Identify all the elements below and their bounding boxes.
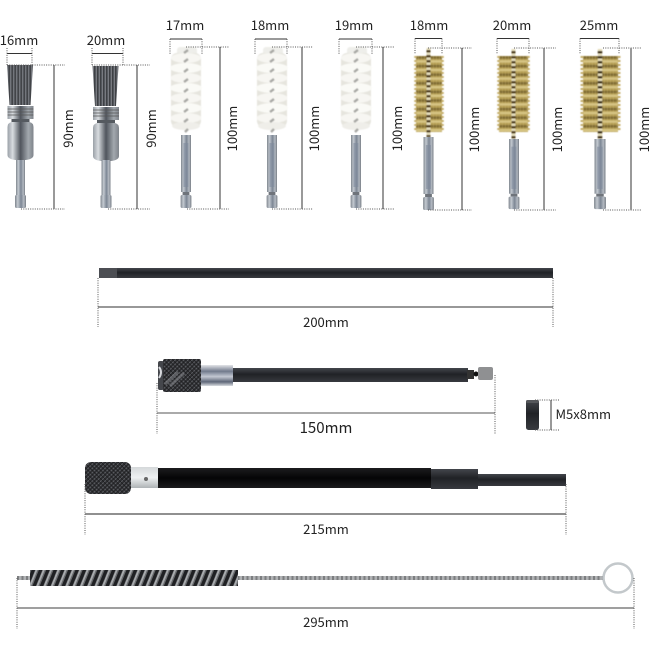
height dimension: [186, 47, 229, 209]
label: 100mm: 100mm: [304, 106, 323, 151]
hex shank: [423, 137, 434, 210]
label: 150mm: 150mm: [300, 417, 352, 438]
label: 100mm: 100mm: [547, 107, 566, 152]
extension rod: 215mm with sleeve: [85, 462, 566, 538]
length dimension: [17, 578, 634, 629]
label: 19mm: 19mm: [335, 15, 373, 34]
brush 3: 17mm nylon brush: [166, 15, 241, 209]
width dimension: [497, 38, 529, 54]
knurled chuck: [158, 359, 201, 392]
extension rod: 150mm with knurled chuck: [157, 359, 495, 438]
nylon head: [170, 47, 202, 132]
label: 90mm: 90mm: [141, 109, 160, 148]
shank: [15, 160, 26, 208]
width dimension: [415, 38, 442, 54]
rod: [99, 268, 553, 278]
label: 200mm: 200mm: [303, 312, 349, 331]
black shaft: [158, 468, 431, 488]
brush 1: 16mm wire end brush: [0, 30, 77, 209]
brush 8: 25mm brass brush: [580, 15, 650, 210]
height dimension: [272, 47, 313, 209]
length dimension: [85, 484, 566, 535]
label: 18mm: 18mm: [410, 15, 448, 34]
sleeve: [526, 400, 539, 430]
shank: [100, 160, 112, 208]
brush 7: 20mm brass brush: [493, 15, 566, 210]
label: 295mm: 295mm: [303, 612, 349, 631]
rear sleeve: [431, 469, 478, 489]
height dimension: [92, 65, 150, 209]
width dimension: [580, 38, 619, 54]
hex tip: [467, 367, 493, 380]
length dimension: [98, 278, 553, 327]
black shaft: [233, 368, 468, 382]
label: 25mm: 25mm: [580, 15, 618, 34]
height dimension: [356, 47, 395, 209]
hex shank: [181, 135, 191, 208]
height dimension: [603, 48, 642, 210]
brush 2: 20mm wire end brush: [87, 30, 160, 209]
size dimension: [535, 400, 560, 430]
knurled chuck: [85, 462, 131, 494]
label: 215mm: 215mm: [303, 519, 349, 538]
width dimension: [7, 48, 32, 65]
hex shank: [509, 139, 519, 209]
nylon head: [256, 47, 288, 132]
hex shank: [351, 135, 361, 208]
long tube cleaning brush: 295mm: [17, 564, 634, 631]
brass head: [498, 49, 528, 139]
label: 20mm: 20mm: [493, 15, 531, 34]
thin end: [478, 474, 566, 486]
loop handle: [604, 564, 632, 592]
label: 100mm: 100mm: [222, 106, 241, 151]
height dimension: [514, 48, 556, 210]
hex shank: [267, 135, 277, 208]
label: 20mm: 20mm: [87, 30, 125, 49]
threaded sleeve: M5x8mm: [526, 400, 611, 430]
extension rod: 200mm: [98, 268, 553, 331]
height dimension: [428, 48, 472, 210]
width dimension: [92, 48, 123, 65]
brass head: [582, 49, 619, 139]
width dimension: [255, 39, 287, 54]
length dimension: [157, 375, 495, 434]
brass head: [416, 48, 442, 137]
label: 90mm: 90mm: [58, 109, 77, 148]
brush head: [7, 65, 34, 160]
nylon head: [340, 47, 372, 132]
brush 4: 18mm nylon brush: [251, 15, 323, 209]
brush 6: 18mm brass brush: [410, 15, 483, 210]
height dimension: [7, 65, 65, 209]
coiled bristles: [30, 570, 238, 586]
silver collar: [201, 365, 233, 386]
silver collar: [131, 467, 158, 488]
brush 5: 19mm nylon brush: [335, 15, 406, 209]
label: 100mm: 100mm: [464, 107, 483, 152]
label: 18mm: 18mm: [251, 15, 289, 34]
brush head: [92, 66, 119, 161]
twisted wire: [17, 576, 604, 580]
hex shank: [594, 139, 606, 209]
label: 16mm: 16mm: [0, 30, 38, 49]
width dimension: [170, 39, 202, 54]
label: 100mm: 100mm: [387, 106, 406, 151]
width dimension: [339, 39, 372, 54]
label: M5x8mm: M5x8mm: [556, 404, 611, 423]
label: 17mm: 17mm: [166, 15, 204, 34]
